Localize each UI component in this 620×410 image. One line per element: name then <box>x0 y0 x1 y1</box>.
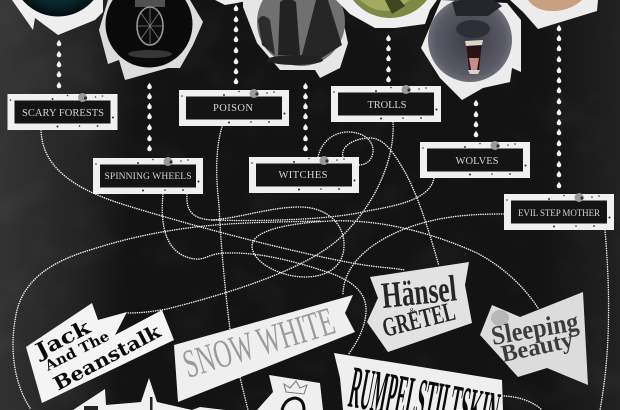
label: scary forests <box>8 93 118 130</box>
banner: Jack and the Beanstalk: Beanstalk <box>50 320 165 395</box>
icon: poison photo edge <box>215 0 250 5</box>
icon: witches photo <box>243 0 348 78</box>
banner: lower middle with crown, cropped <box>257 375 323 410</box>
label: witches: WITCHES <box>278 170 328 181</box>
droplet trail: evil step mother <box>557 25 561 188</box>
label: poison: POISON <box>213 103 253 114</box>
banner: Rumpelstiltskin <box>334 353 504 410</box>
label: trolls: TROLLS <box>368 100 407 111</box>
icon: evil step mother photo <box>510 0 598 29</box>
droplet trail: wolves <box>474 100 478 137</box>
banner: Sleeping Beauty <box>480 292 588 385</box>
banner: Hansel and Gretel <box>367 262 472 352</box>
icon: troll photo <box>336 0 437 28</box>
banner: Hansel and Gretel: Hänsel <box>380 268 459 317</box>
droplet trail: spinning wheels <box>147 83 152 151</box>
label: scary forests: SCARY FORESTS <box>22 108 104 119</box>
label: evil step mother: EVIL STEP MOTHER <box>518 208 600 218</box>
banner: Jack and the Beanstalk: Jack <box>29 314 95 364</box>
droplet trail: poison <box>234 5 238 84</box>
banner: Jack and the Beanstalk <box>26 303 174 403</box>
icon: wolf photo <box>421 0 521 100</box>
banner: lower left, cropped <box>73 378 225 410</box>
label: witches <box>249 156 359 193</box>
icon: spinning wheel photo <box>99 0 203 80</box>
label: wolves: WOLVES <box>456 156 499 167</box>
label: wolves <box>420 141 530 178</box>
label: evil step mother <box>504 193 614 230</box>
droplet trail: trolls <box>386 35 391 82</box>
banner: Snow White <box>174 295 355 402</box>
banner: Hansel and Gretel: GRETEL <box>379 296 458 343</box>
droplet trail: scary forests <box>57 40 61 88</box>
label: spinning wheels <box>93 157 203 194</box>
banner: Jack and the Beanstalk: And The <box>42 328 112 375</box>
banner: Sleeping Beauty: Sleeping <box>489 306 581 351</box>
label: spinning wheels: SPINNING WHEELS <box>104 172 192 182</box>
banner: Sleeping Beauty: Beauty <box>499 327 576 368</box>
icon: scary forest photo <box>12 0 104 35</box>
label: trolls <box>331 85 441 122</box>
label: poison <box>179 89 289 126</box>
banner: Snow White: SNOW WHITE <box>177 298 340 387</box>
dotted connector lines <box>13 122 609 410</box>
droplet trail: witches <box>303 83 308 151</box>
banner: Hansel and Gretel: & <box>409 306 417 316</box>
